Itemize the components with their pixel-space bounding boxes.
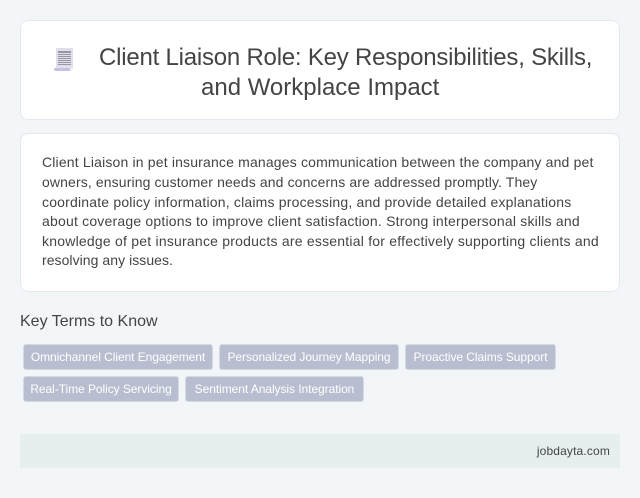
chip — [185, 376, 364, 402]
chip: Proactive Claims Support — [414, 350, 547, 364]
description text: knowledge of pet insurance products are essential for effectively supporting clients and — [42, 233, 599, 249]
title line 2: and Workplace Impact — [201, 74, 439, 101]
chip: Real-Time Policy Servicing — [30, 382, 172, 396]
description text: about coverage options to improve client satisfaction. Strong interpersonal skills and — [42, 213, 580, 229]
chip: Omnichannel Client Engagement — [31, 350, 205, 364]
chip — [219, 344, 399, 370]
description text: coordinate policy information, claims processing, and provide detailed explanations — [42, 194, 571, 210]
footer source text: jobdayta.com — [537, 444, 610, 458]
chip — [23, 376, 179, 402]
description text: Client Liaison in pet insurance manages communication between the company and pet — [42, 154, 594, 170]
chip: Personalized Journey Mapping — [227, 350, 391, 364]
title line 1: Client Liaison Role: Key Responsibilities, Skills, — [99, 44, 592, 71]
chip — [405, 344, 556, 370]
description text: resolving any issues. — [42, 252, 173, 268]
description text: owners, ensuring customer needs and concerns are addressed promptly. They — [42, 174, 537, 190]
chip — [23, 344, 213, 370]
footer bar — [20, 434, 620, 468]
icon: document scroll — [54, 48, 73, 71]
panel: description card — [20, 133, 620, 292]
chip: Sentiment Analysis Integration — [195, 382, 354, 396]
heading: key terms: Key Terms to Know — [20, 313, 158, 330]
panel: title card — [20, 20, 620, 120]
description text — [42, 154, 599, 268]
key term chips — [23, 344, 556, 402]
